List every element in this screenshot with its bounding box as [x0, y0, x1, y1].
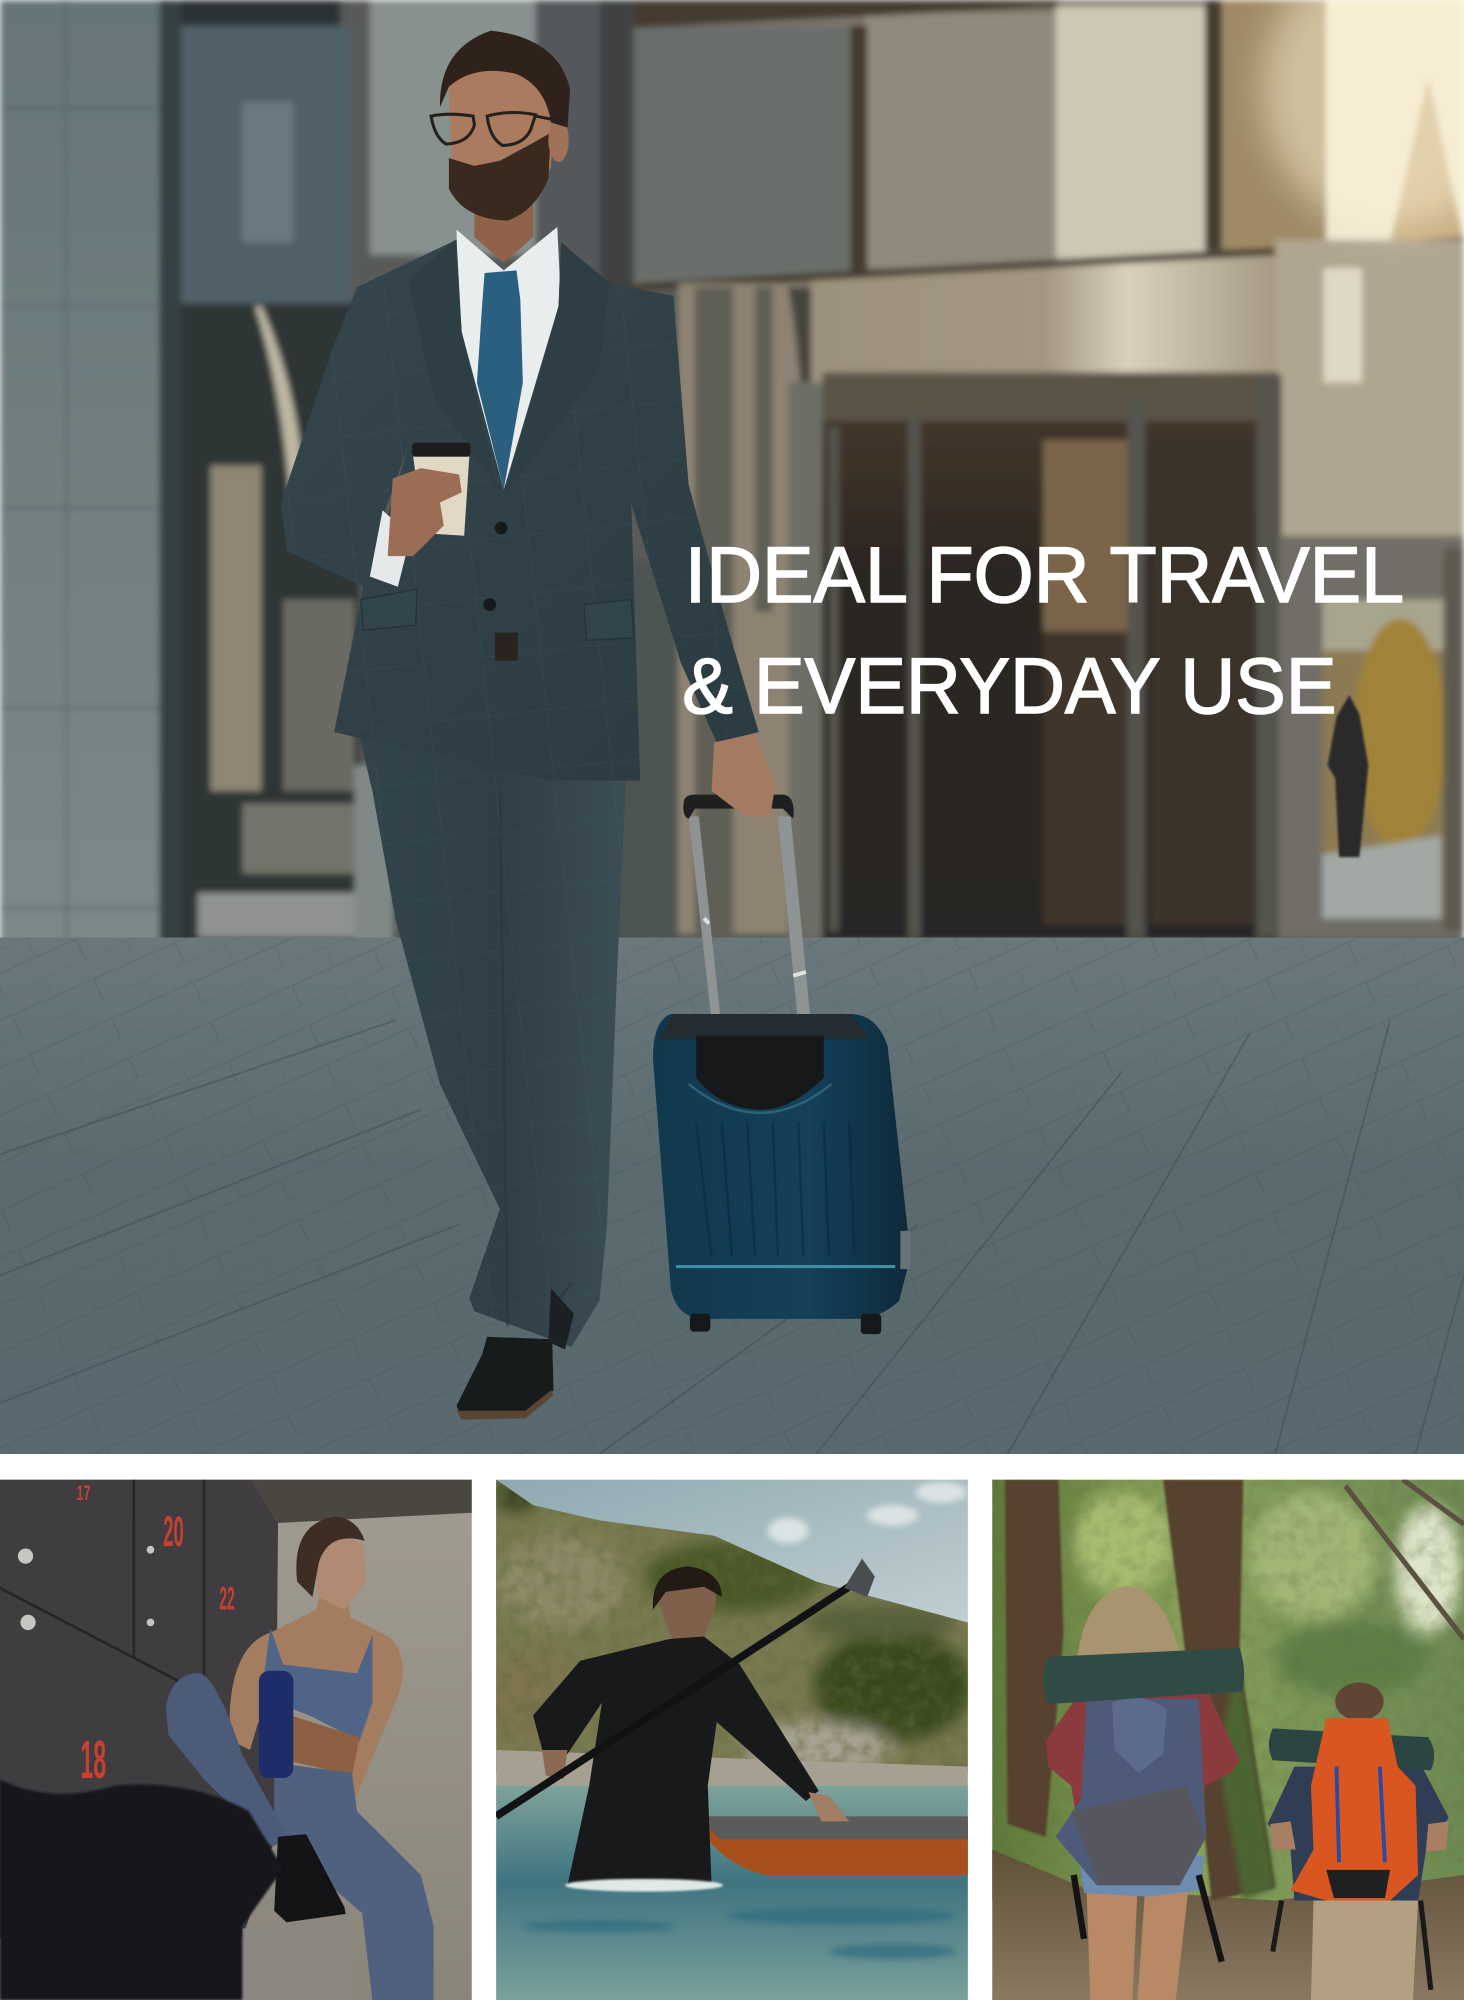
ear — [548, 119, 569, 162]
tie — [477, 270, 523, 490]
beard — [449, 133, 551, 221]
forest background — [992, 1480, 1464, 1901]
shirt cuff — [370, 510, 411, 587]
pockets — [361, 589, 634, 640]
sneaker — [274, 1834, 347, 1929]
sky — [496, 1480, 968, 1633]
locker numbers: 18 — [80, 1730, 106, 1790]
sun glow — [1263, 0, 1464, 230]
bench — [240, 1913, 351, 2000]
shirt — [457, 227, 561, 497]
backpack lower pocket — [1071, 1786, 1205, 1885]
leggings raised leg — [166, 1673, 288, 1847]
heading text: & EVERYDAY USE — [682, 641, 1336, 730]
tree trunks — [1005, 1480, 1275, 1901]
sports top — [261, 1628, 372, 1741]
light foliage — [1074, 1492, 1461, 1696]
leggings far leg — [274, 1763, 434, 2000]
water — [496, 1786, 968, 2000]
woman — [166, 1517, 434, 2000]
orange backpack — [1291, 1718, 1418, 1901]
plaid shirt — [1046, 1694, 1240, 1849]
blue webbing — [1336, 1767, 1385, 1862]
paddleboard — [695, 1821, 968, 1875]
holding hand — [388, 468, 462, 556]
ceiling — [251, 1480, 472, 1523]
shoe — [457, 1337, 553, 1420]
trouser crease — [500, 791, 571, 1327]
coffee cup — [412, 443, 471, 536]
black gym bag — [0, 1779, 283, 2000]
wetsuit man — [533, 1566, 849, 1885]
rolled mat — [1043, 1648, 1244, 1704]
blonde hair — [1078, 1585, 1180, 1656]
leaf texture — [992, 1480, 1464, 1862]
splash — [565, 1879, 723, 1892]
lapels — [408, 240, 610, 495]
paddle — [496, 1559, 875, 1816]
paved ground — [0, 938, 1464, 1454]
arms — [1270, 1821, 1449, 1852]
locker numbers: 20 — [163, 1507, 184, 1555]
shoe sole — [457, 1390, 553, 1420]
pack base — [1326, 1870, 1390, 1898]
trousers — [357, 727, 627, 1347]
hair — [440, 31, 570, 128]
hillside — [496, 1480, 968, 1773]
glasses — [431, 113, 561, 145]
neck — [474, 191, 533, 263]
luggage hand — [712, 733, 775, 816]
jacket plaid — [281, 240, 759, 781]
jacket buttons — [483, 522, 508, 611]
backpack — [1056, 1699, 1206, 1885]
belt — [495, 633, 518, 661]
hiker one — [1043, 1585, 1244, 2000]
building backdrop — [0, 0, 1464, 957]
panel: hikers with backpacks in forest — [992, 1480, 1464, 2000]
water ripples — [523, 1907, 956, 1959]
head — [1335, 1682, 1384, 1721]
backpack upper pocket — [1112, 1698, 1167, 1773]
heading text — [682, 530, 1404, 730]
hair — [296, 1517, 365, 1597]
clouds — [768, 1482, 967, 1543]
branches — [1345, 1480, 1464, 1639]
locker knobs — [18, 1546, 154, 1630]
hands — [542, 1750, 567, 1779]
locker numbers — [77, 1480, 235, 1790]
midriff — [287, 1716, 360, 1776]
heading text: IDEAL FOR TRAVEL — [685, 530, 1404, 619]
shoulders and arms — [230, 1588, 403, 1801]
hair — [653, 1566, 722, 1610]
face — [449, 66, 553, 219]
tie tail — [499, 599, 510, 635]
locker numbers: 22 — [219, 1582, 235, 1617]
legs — [1087, 1888, 1189, 2000]
panel: athlete resting in gym locker room — [0, 1480, 472, 2000]
suitcase — [653, 795, 911, 1334]
plaid shirt — [1268, 1767, 1449, 1901]
ivy on trunk — [1218, 1658, 1275, 1901]
reflected figure in the far doorway — [1328, 695, 1368, 857]
board top — [695, 1816, 968, 1839]
locker numbers: 17 — [77, 1480, 90, 1505]
hiker two — [1268, 1682, 1449, 2000]
jacket — [281, 240, 759, 781]
beach — [496, 1750, 968, 1805]
head — [655, 1571, 716, 1645]
straps — [1273, 1901, 1431, 1990]
businessman — [281, 31, 775, 1420]
mat — [1269, 1728, 1434, 1770]
lockers — [0, 1480, 278, 1939]
trousers — [1311, 1901, 1418, 2000]
trouser plaid — [372, 765, 627, 1347]
water bottle — [259, 1671, 293, 1778]
wetsuit — [533, 1636, 819, 1885]
panel: paddleboarder at the coast — [485, 1477, 972, 2000]
back shoe — [548, 1288, 574, 1349]
straps — [1074, 1875, 1222, 1962]
denim shorts — [1079, 1856, 1204, 1897]
upper glass panes — [634, 0, 1208, 285]
gym wall — [0, 1480, 472, 2000]
panel: hero photo of businessman with suitcase — [0, 0, 1464, 1454]
forest floor — [992, 1849, 1464, 2000]
face — [311, 1534, 366, 1610]
vegetation patches — [485, 1477, 972, 1773]
